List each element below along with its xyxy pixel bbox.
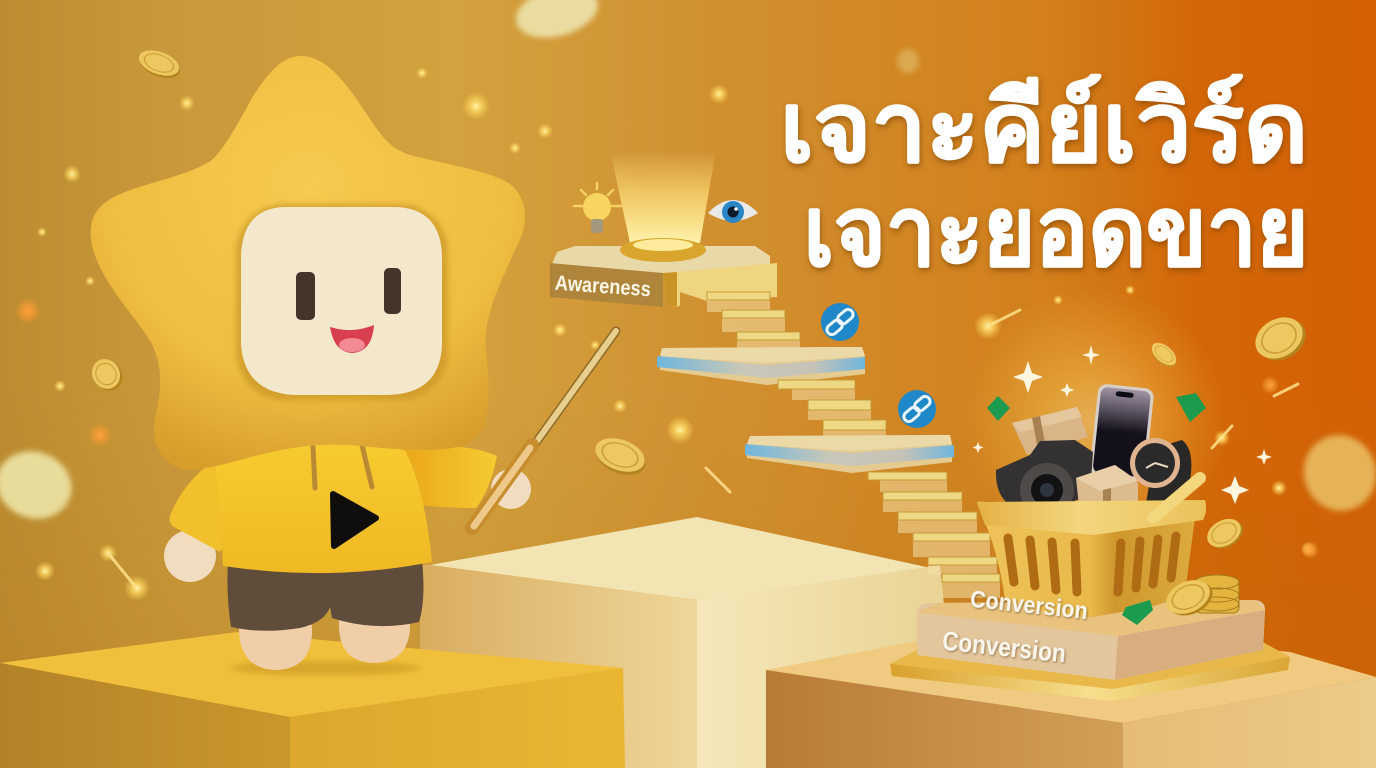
- label: awareness: Awareness: [554, 272, 652, 301]
- right sleeve: [400, 446, 497, 508]
- mascot: [91, 56, 616, 675]
- platform: conversion gold base: [890, 638, 1290, 701]
- pointer: [472, 331, 616, 528]
- coin leaning: [1161, 573, 1218, 623]
- label: conversion lower: Conversion: [941, 626, 1067, 668]
- legs: [239, 620, 410, 670]
- title: [780, 73, 1308, 286]
- basket slots: [1008, 536, 1176, 592]
- shorts: [227, 560, 423, 631]
- left hand: [491, 469, 531, 509]
- face rim shadow: [236, 204, 448, 400]
- basket handle: [1153, 478, 1200, 518]
- blurred background coins: [0, 0, 1376, 529]
- basket glow: [960, 285, 1230, 555]
- face: [241, 207, 442, 395]
- icon: watch: [1130, 438, 1191, 510]
- small coins: [87, 45, 1313, 555]
- label: awareness: [550, 263, 663, 307]
- label: conversion upper: Conversion: [969, 586, 1089, 625]
- stairs 3: [868, 472, 1000, 598]
- icon: box top: [1012, 407, 1088, 455]
- icon: link 2: [898, 390, 936, 428]
- podium: right tan: [766, 625, 1376, 768]
- floating sparkles: [35, 67, 1315, 601]
- gems: [987, 393, 1206, 625]
- icon: play: [333, 494, 376, 546]
- stairs 2: [778, 380, 886, 438]
- icon: link 1: [821, 303, 859, 341]
- platform: middle 1: [657, 347, 865, 385]
- mouth: [330, 325, 374, 353]
- shopping basket: [960, 285, 1272, 625]
- title: เจาะยอดขาย: [804, 177, 1308, 286]
- staircase funnel: [550, 150, 1290, 701]
- icon: camera: [996, 440, 1093, 517]
- spark trails: [108, 310, 1298, 586]
- icon: eye: [708, 200, 758, 223]
- orange glow dots: [15, 298, 1319, 559]
- platform: awareness: [550, 238, 777, 307]
- eyes: [296, 268, 401, 320]
- platform: conversion glass: [917, 600, 1265, 680]
- podium: center cream: [420, 517, 960, 768]
- right hand: [164, 530, 216, 582]
- icon: phone: [1089, 383, 1154, 481]
- foot shadows: [230, 661, 420, 675]
- star head: [91, 56, 525, 470]
- basket rim: [977, 500, 1206, 535]
- podium: left yellow: [0, 632, 625, 768]
- basket body: [985, 518, 1195, 617]
- stairs 1: [707, 292, 800, 350]
- sparkles: [972, 345, 1272, 504]
- left sleeve: [170, 460, 240, 552]
- icon: light bulb: [574, 183, 621, 233]
- title: เจาะคีย์เวิร์ด: [780, 73, 1308, 182]
- podiums: [0, 517, 1376, 768]
- beam of light: [610, 150, 716, 243]
- coin stack: [1195, 575, 1239, 613]
- hoodie body: [215, 442, 432, 573]
- icon: box front: [1076, 465, 1138, 516]
- platform: middle 2: [745, 435, 954, 473]
- hoodie strings: [313, 445, 372, 488]
